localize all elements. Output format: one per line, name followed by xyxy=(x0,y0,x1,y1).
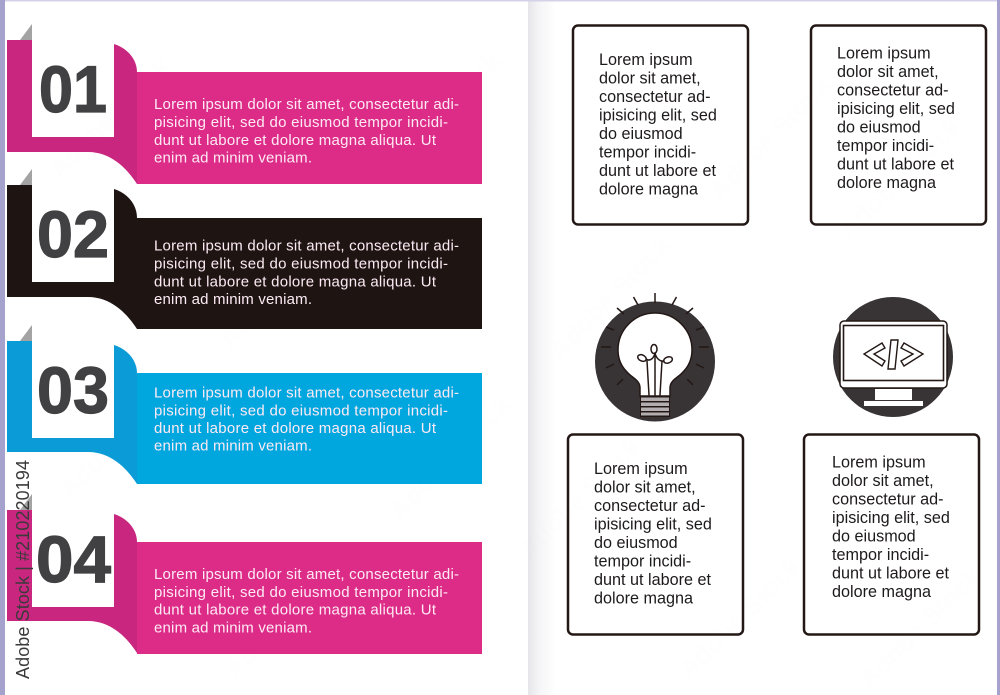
watermark: Adobe Stock xyxy=(43,50,177,184)
text box: top right: dolore magna xyxy=(837,174,936,192)
text box: top right: consectetur ad- xyxy=(837,82,949,100)
02 text: Lorem ipsum dolor sit amet, consectetur adi- xyxy=(154,238,459,254)
text box: bottom left: tempor incidi- xyxy=(594,552,691,570)
text box: bottom right: Lorem ipsum xyxy=(832,454,926,472)
watermark: Adobe Stock xyxy=(543,230,677,364)
01 fold triangle xyxy=(20,24,32,40)
04 text: pisicing elit, sed do eiusmod tempor incidi- xyxy=(154,584,448,601)
text box: top right: Lorem ipsum xyxy=(837,44,931,62)
02 main bar xyxy=(137,218,482,329)
03 text xyxy=(154,384,459,454)
02 number: 02 xyxy=(37,197,109,271)
text box: bottom right: tempor incidi- xyxy=(832,546,929,564)
text box: bottom right xyxy=(804,434,979,634)
watermark: Adobe Stock xyxy=(383,390,517,524)
01 ribbon tab xyxy=(7,40,137,184)
text box: bottom right: do eiusmod xyxy=(832,528,916,546)
text box: top right: ipisicing elit, sed xyxy=(837,100,955,118)
watermark: Adobe Stock xyxy=(373,45,507,179)
04 text xyxy=(154,566,459,636)
03 fold triangle xyxy=(20,325,32,341)
01 number: 01 xyxy=(39,52,107,126)
text box: top left xyxy=(573,26,748,224)
text box: top right xyxy=(811,26,986,224)
text box: top left: consectetur ad- xyxy=(599,88,711,106)
03 main bar xyxy=(137,373,482,484)
panel: step 01 xyxy=(7,24,482,184)
text box: bottom left: dunt ut labore et xyxy=(594,571,711,589)
text box: top left: dolore magna xyxy=(599,180,698,198)
01 text xyxy=(154,96,459,166)
04 ribbon tab xyxy=(7,510,137,653)
watermark: Adobe Stock xyxy=(673,550,807,684)
watermark: Adobe Stock xyxy=(53,370,187,504)
03 text: pisicing elit, sed do eiusmod tempor incidi- xyxy=(154,402,448,420)
text box: top left: dolor sit amet, xyxy=(599,70,701,88)
text box: bottom right: dolor sit amet, xyxy=(832,472,934,490)
text box: bottom right: dolore magna xyxy=(832,583,931,601)
04 fold triangle xyxy=(20,494,32,510)
01 main bar xyxy=(137,72,482,184)
02 text: dunt ut labore et dolore magna aliqua. Ut xyxy=(154,274,437,290)
panel: step 02 xyxy=(7,169,482,329)
text box: top left: dunt ut labore et xyxy=(599,162,716,180)
text box: top right: dolor sit amet, xyxy=(837,63,939,81)
01 text: enim ad minim veniam. xyxy=(154,150,312,166)
text box: top right: dunt ut labore et xyxy=(837,156,954,174)
text box: top right: do eiusmod xyxy=(837,118,921,136)
text box: bottom left: do eiusmod xyxy=(594,534,678,552)
text box: bottom left: dolore magna xyxy=(594,590,693,608)
text box: bottom right: dunt ut labore et xyxy=(832,564,949,582)
04 text: enim ad minim veniam. xyxy=(154,620,312,636)
watermark: Adobe Stock xyxy=(833,110,967,244)
02 text: pisicing elit, sed do eiusmod tempor incidi- xyxy=(154,256,448,272)
text box: top left: tempor incidi- xyxy=(599,144,696,162)
text box: top left: Lorem ipsum xyxy=(599,51,693,69)
watermark: Adobe Stock xyxy=(703,70,837,204)
text box: bottom left: ipisicing elit, sed xyxy=(594,516,712,534)
stock id vertical label: Adobe Stock | #210220194 xyxy=(13,460,33,679)
watermark: Adobe Stock xyxy=(213,220,347,354)
01 text: pisicing elit, sed do eiusmod tempor incidi- xyxy=(154,114,448,131)
02 text xyxy=(154,238,459,308)
03 text: Lorem ipsum dolor sit amet, consectetur adi- xyxy=(154,384,459,402)
icon: code monitor xyxy=(833,297,953,417)
02 ribbon tab xyxy=(7,185,137,329)
03 text: enim ad minim veniam. xyxy=(154,438,312,454)
03 text: dunt ut labore et dolore magna aliqua. Ut xyxy=(154,420,437,437)
02 text: enim ad minim veniam. xyxy=(154,291,312,308)
watermark: Adobe Stock xyxy=(218,550,352,684)
text box: bottom right: ipisicing elit, sed xyxy=(832,509,950,527)
text box: bottom left: dolor sit amet, xyxy=(594,478,696,496)
watermark: Adobe Stock xyxy=(853,560,987,694)
text box: top right: tempor incidi- xyxy=(837,137,934,155)
01 text: Lorem ipsum dolor sit amet, consectetur adi- xyxy=(154,96,459,113)
04 text: dunt ut labore et dolore magna aliqua. Ut xyxy=(154,602,437,618)
03 ribbon tab xyxy=(7,341,137,484)
panel: step 03 xyxy=(7,325,482,484)
text box: top left: ipisicing elit, sed xyxy=(599,106,717,124)
watermark: Adobe Stock xyxy=(513,430,647,564)
text box: bottom left xyxy=(568,434,743,634)
03 number: 03 xyxy=(37,353,109,427)
panel: step 04 xyxy=(7,494,482,654)
02 fold triangle xyxy=(20,169,32,185)
text box: bottom left: consectetur ad- xyxy=(594,497,706,515)
text box: bottom left: Lorem ipsum xyxy=(594,460,688,478)
04 number: 04 xyxy=(36,522,111,596)
04 text: Lorem ipsum dolor sit amet, consectetur adi- xyxy=(154,566,459,583)
text box: bottom right: consectetur ad- xyxy=(832,490,944,508)
text box: top left: do eiusmod xyxy=(599,125,683,143)
04 main bar xyxy=(137,542,482,654)
icon: light bulb xyxy=(595,293,715,422)
01 text: dunt ut labore et dolore magna aliqua. Ut xyxy=(154,132,437,149)
